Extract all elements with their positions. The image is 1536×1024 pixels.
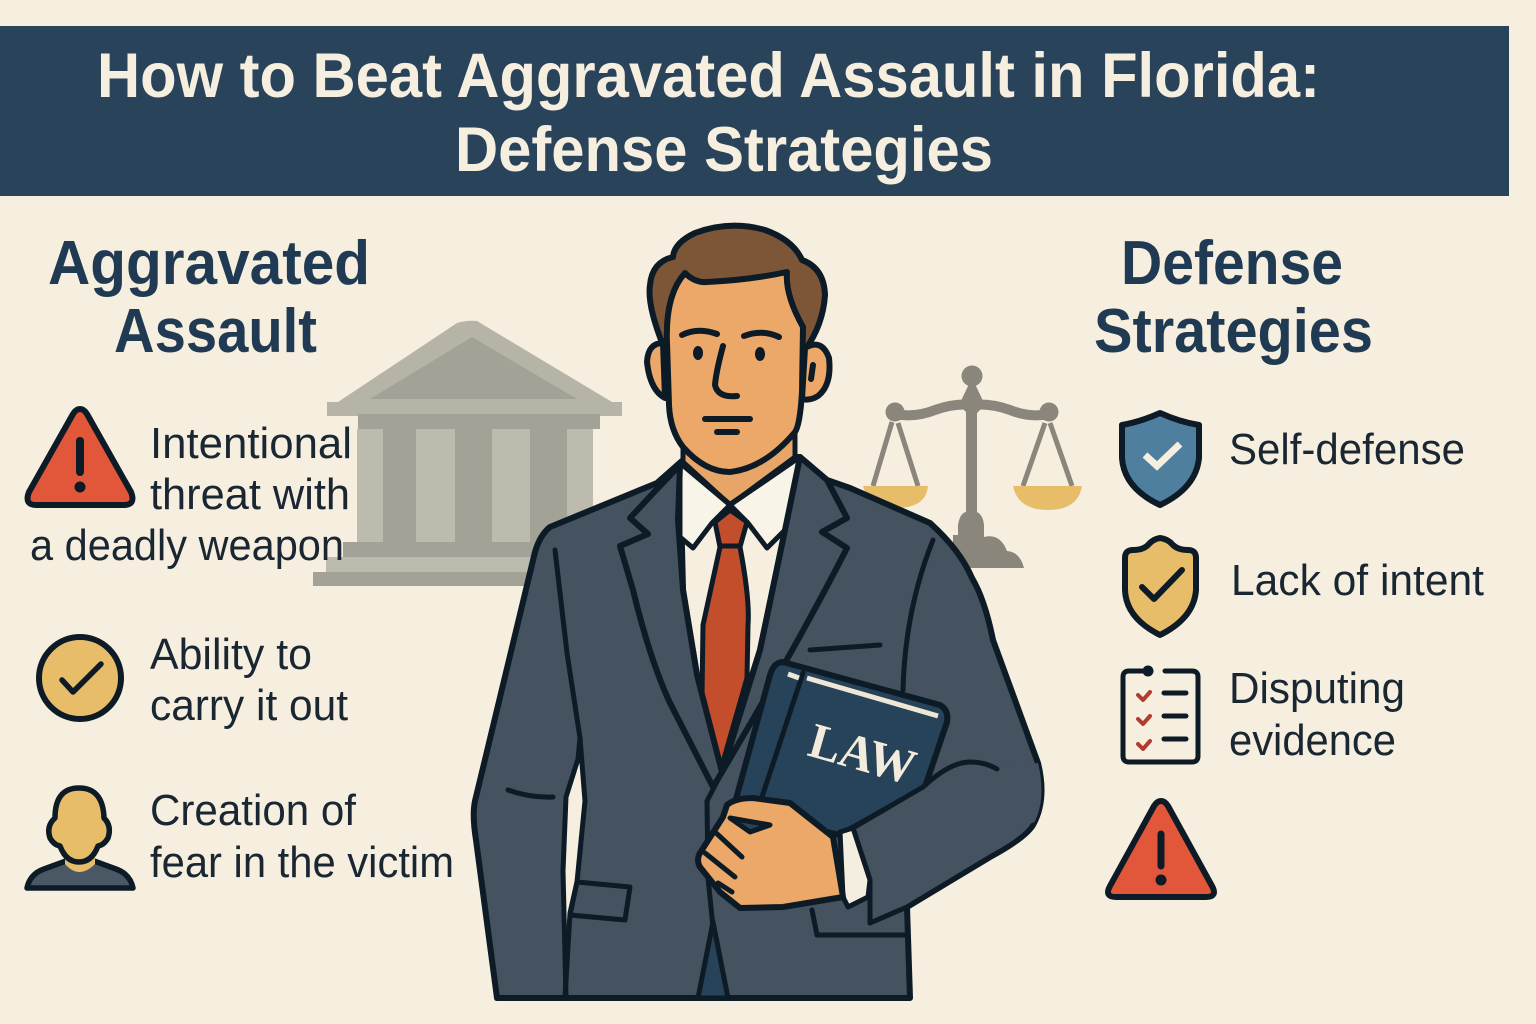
face [667, 272, 803, 472]
item: intentional threat [28, 409, 352, 570]
right sleeve [853, 763, 1042, 923]
item: ability to carry it out [39, 630, 348, 730]
tie [702, 510, 748, 769]
shirt cuff [840, 828, 870, 907]
heading: Defense Strategies: Strategies [1094, 297, 1373, 366]
text: intentional threat with a deadly weapon: Intentional [150, 419, 352, 468]
item: disputing evidence [1123, 664, 1405, 765]
title banner [0, 26, 1509, 196]
jacket seams and pockets [508, 540, 933, 997]
item: lack of intent [1125, 538, 1484, 635]
title banner: Defense Strategies [455, 115, 993, 185]
heading: Aggravated Assault: Assault [114, 297, 317, 366]
text: disputing evidence: evidence [1229, 716, 1396, 765]
collar [680, 457, 800, 548]
background icon: courthouse [313, 321, 622, 586]
gap between arm and torso [563, 757, 585, 945]
law book [733, 662, 947, 835]
hair [650, 226, 825, 350]
lapels [620, 465, 722, 787]
text: intentional threat with a deadly weapon: a deadly weapon [30, 521, 344, 570]
neck [683, 430, 795, 505]
text: ability to carry it out: Ability to [150, 630, 312, 679]
text: intentional threat with a deadly weapon [30, 419, 352, 570]
text: disputing evidence [1229, 664, 1405, 765]
icon: warning triangle bottom right [1108, 801, 1214, 897]
background icon: scales of justice [863, 366, 1082, 568]
hand [698, 798, 843, 908]
heading: Defense Strategies [1094, 229, 1373, 366]
icon: blue shield [1122, 413, 1199, 505]
item: self-defense [1122, 413, 1465, 505]
text: lack of intent: Lack of intent [1231, 556, 1484, 605]
item: creation of fear [27, 786, 454, 888]
heading: Aggravated Assault [48, 229, 370, 366]
text: self-defense: Self-defense [1229, 425, 1465, 474]
text: intentional threat with a deadly weapon: threat with [150, 470, 350, 519]
facial features [682, 331, 813, 432]
text: creation of fear in the victim [150, 786, 454, 887]
text: creation of fear in the victim: Creation of [150, 786, 357, 835]
icon: gold shield [1125, 538, 1196, 635]
text: ability to carry it out: carry it out [150, 681, 348, 730]
suit jacket [474, 457, 1042, 998]
text: creation of fear in the victim: fear in the victim [150, 838, 454, 887]
heading: Defense Strategies: Defense [1121, 229, 1343, 298]
text: ability to carry it out [150, 630, 348, 730]
shirt [680, 457, 800, 770]
ears [647, 343, 830, 400]
illustration: lawyer in suit [474, 226, 1042, 998]
icon: person [27, 788, 133, 888]
title banner: How to Beat Aggravated Assault in Florida: [97, 41, 1320, 111]
icon: checklist [1123, 666, 1198, 762]
heading: Aggravated Assault: Aggravated [48, 229, 370, 298]
icon: warning triangle [28, 409, 132, 505]
jacket opening [698, 922, 728, 998]
law book: LAW [803, 712, 922, 795]
text: disputing evidence: Disputing [1229, 664, 1405, 713]
icon: gold check circle [39, 637, 121, 719]
